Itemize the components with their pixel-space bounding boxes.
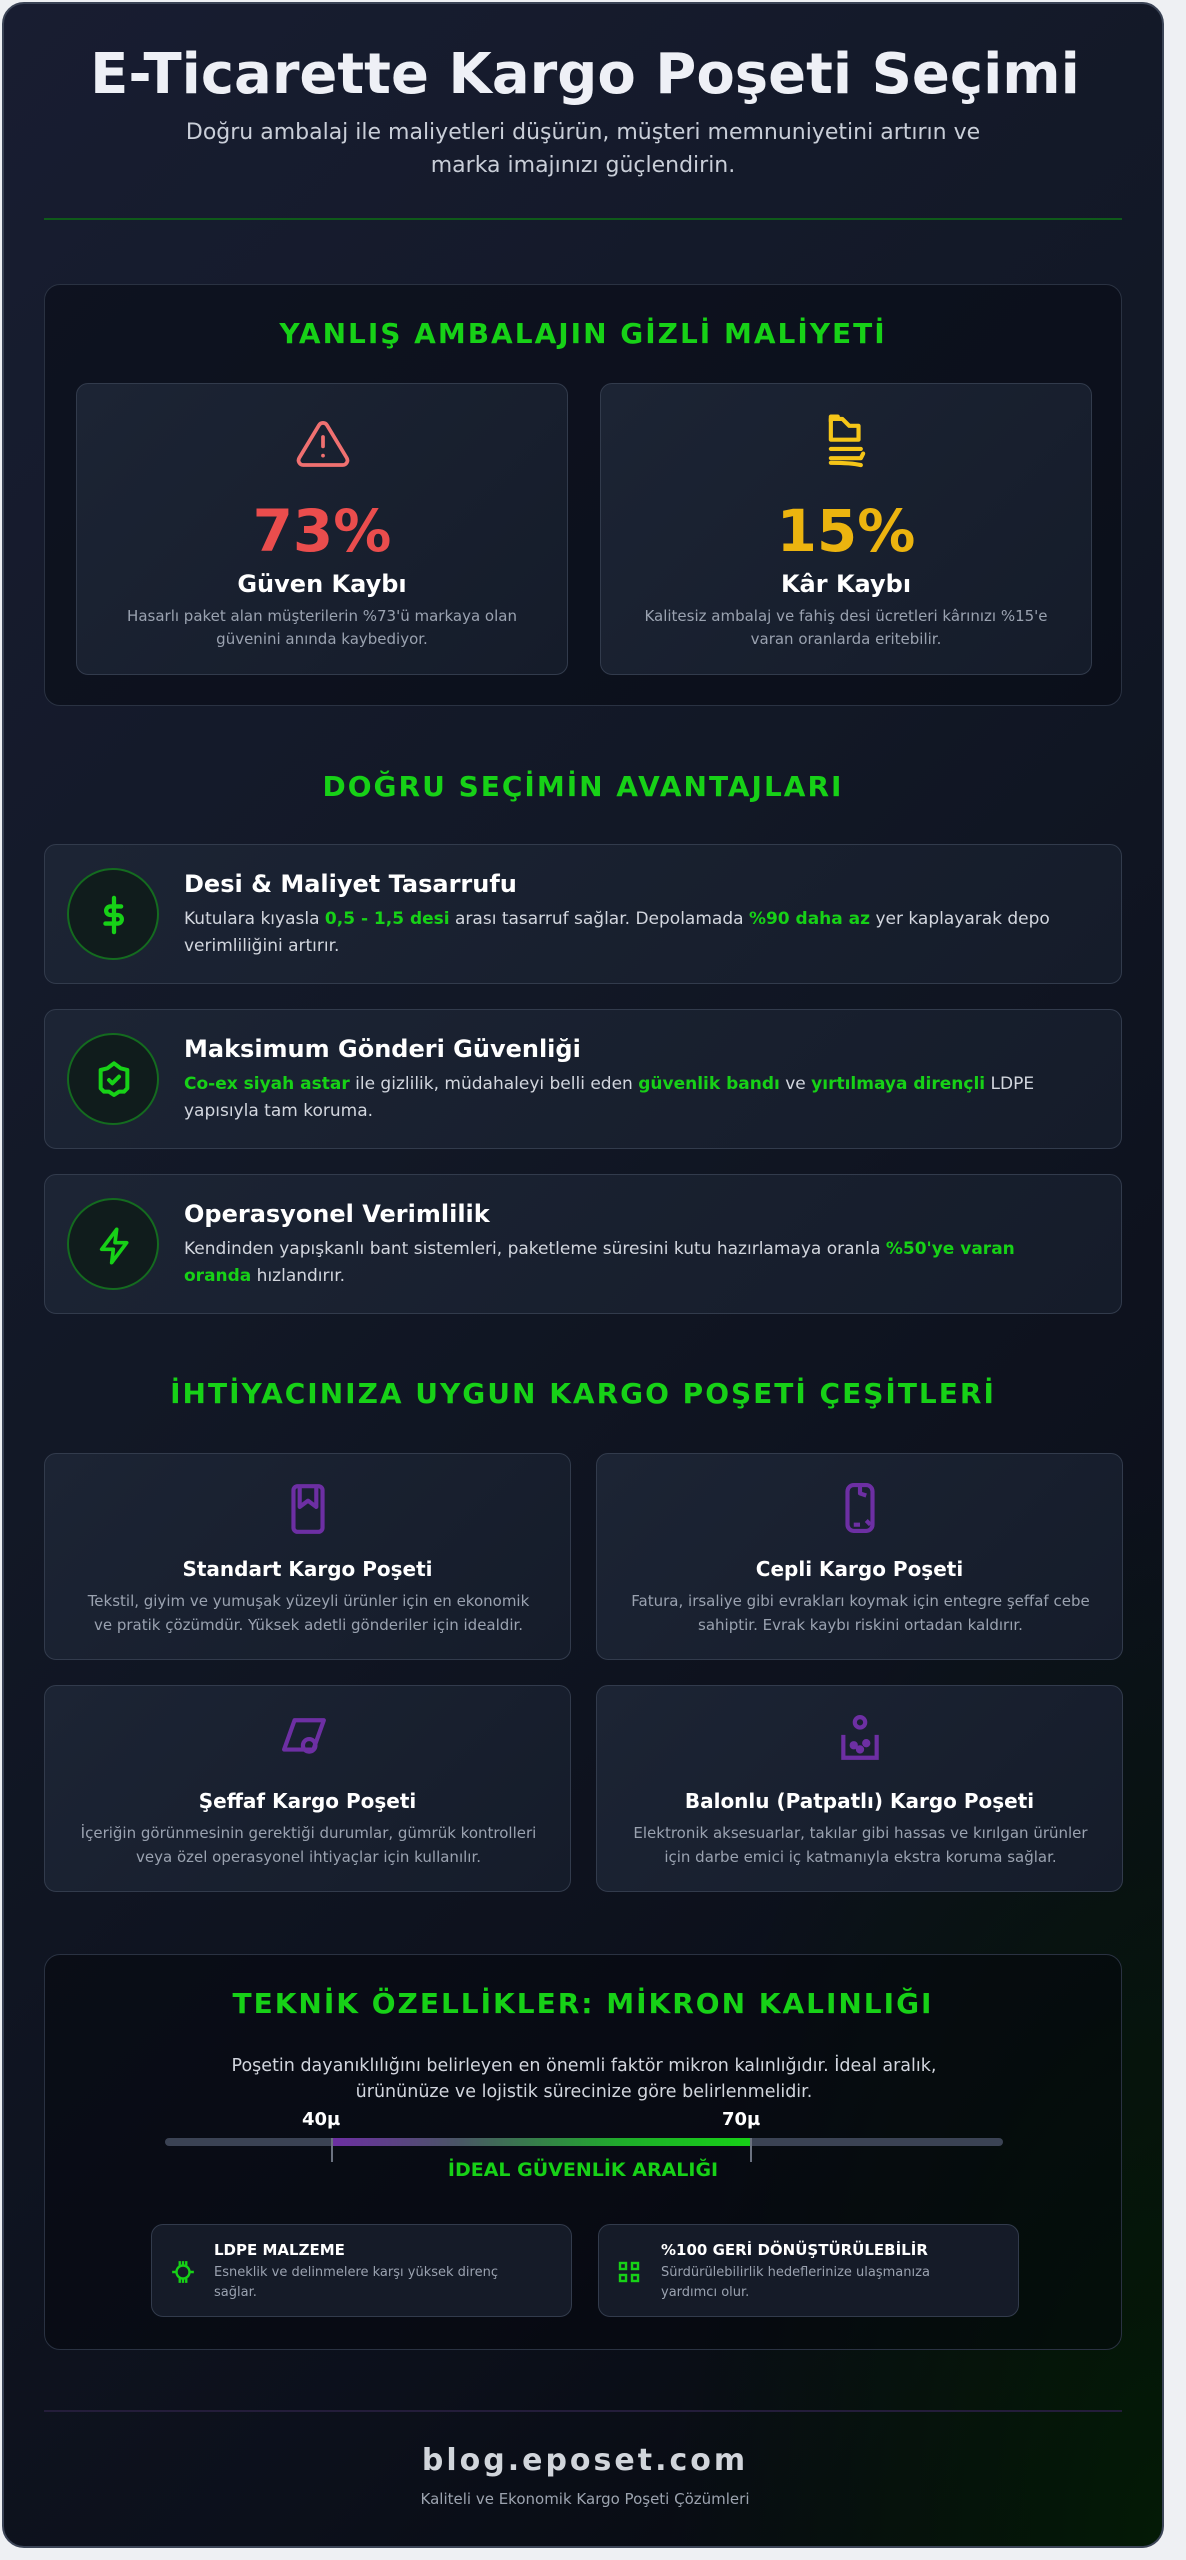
subtitle: Doğru ambalaj ile maliyetleri düşürün, müşteri memnuniyetini artırın ve marka imajınızı güçlendirin.	[186, 120, 980, 178]
icon: bubble	[841, 1715, 879, 1760]
footer: tagline: Kaliteli ve Ekonomik Kargo Poşeti Çözümleri	[421, 2490, 749, 2508]
type card: bubble	[596, 1685, 1123, 1892]
desc: Kalitesiz ambalaj ve fahiş desi ücretleri kârınızı %15'e varan oranlarda eritebilir.	[644, 607, 1048, 648]
chart: micron range	[165, 2109, 1003, 2162]
title: Balonlu (Patpatlı) Kargo Poşeti	[685, 1789, 1034, 1813]
spec: LDPE: Esneklik ve delinmelere karşı yüksek direnç sağlar.	[214, 2265, 498, 2300]
icon: grid	[618, 2262, 640, 2282]
feature: security	[44, 1009, 1122, 1149]
icon: lightning	[67, 1198, 159, 1290]
desc: İçeriğin görünmesinin gerektiği durumlar, gümrük kontrolleri veya özel operasyonel ihtiyaçlar için kullanılır.	[81, 1824, 536, 1866]
desc: Elektronik aksesuarlar, takılar gibi hassas ve kırılgan ürünler için darbe emici iç katmanıyla ekstra koruma sağlar.	[633, 1824, 1088, 1866]
icon: warning	[296, 421, 350, 467]
label: ideal range: İDEAL GÜVENLİK ARALIĞI	[448, 2159, 718, 2181]
title: Cepli Kargo Poşeti	[756, 1557, 963, 1581]
desc: Tekstil, giyim ve yumuşak yüzeyli ürünler için en ekonomik ve pratik çözümdür. Yüksek adetli gönderiler için idealdir.	[88, 1592, 529, 1634]
icon: money stack	[828, 414, 866, 468]
stat card: profit loss	[600, 383, 1092, 675]
panel: hidden cost	[44, 284, 1122, 706]
title: Operasyonel Verimlilik	[184, 1200, 490, 1228]
spec: recyclable: %100 GERİ DÖNÜŞTÜRÜLEBİLİR	[661, 2241, 928, 2259]
stat card: trust loss	[76, 383, 568, 675]
icon: gear	[172, 2261, 194, 2283]
title: Standart Kargo Poşeti	[182, 1557, 433, 1581]
icon: phone doc	[845, 1483, 875, 1533]
icon: dollar	[67, 868, 159, 960]
panel: micron thickness	[44, 1954, 1122, 2350]
icon: bookmark	[291, 1484, 325, 1534]
number 73%: 73%	[253, 497, 391, 565]
title: Maksimum Gönderi Güvenliği	[184, 1035, 581, 1063]
desc: Co-ex siyah astar ile gizlilik, müdahaleyi belli eden güvenlik bandı ve yırtılmaya dirençli LDPE yapısıyla tam koruma.	[184, 1074, 1034, 1121]
icon: shield check	[67, 1033, 159, 1125]
desc: Kutulara kıyasla 0,5 - 1,5 desi arası tasarruf sağlar. Depolamada %90 daha az yer kaplayarak depo verimliliğini artırır.	[184, 909, 1050, 956]
type card: standard	[44, 1453, 571, 1660]
spec: recyclable: Sürdürülebilirlik hedeflerinize ulaşmanıza yardımcı olur.	[661, 2265, 930, 2300]
spec: LDPE: LDPE MALZEME	[214, 2241, 345, 2259]
heading: bag types: İHTİYACINIZA UYGUN KARGO POŞETİ ÇEŞİTLERİ	[170, 1377, 996, 1410]
heading: technical: TEKNİK ÖZELLİKLER: MİKRON KALINLIĞI	[232, 1987, 933, 2020]
chart: micron range: 70µ	[722, 2109, 760, 2130]
spec: LDPE	[151, 2224, 572, 2317]
spec: recyclable	[598, 2224, 1019, 2317]
desc: Hasarlı paket alan müşterilerin %73'ü markaya olan güvenini anında kaybediyor.	[127, 607, 517, 648]
heading: hidden cost: YANLIŞ AMBALAJIN GİZLİ MALİYETİ	[279, 317, 887, 350]
label: Kâr Kaybı	[781, 570, 911, 598]
icon: transparent bag	[282, 1718, 326, 1754]
feature: desi savings	[44, 844, 1122, 984]
heading: advantages: DOĞRU SEÇİMİN AVANTAJLARI	[323, 770, 843, 803]
desc: Kendinden yapışkanlı bant sistemleri, paketleme süresini kutu hazırlamaya oranla %50'ye varan oranda hızlandırır.	[184, 1239, 1015, 1286]
desc: Fatura, irsaliye gibi evrakları koymak için entegre şeffaf cebe sahiptir. Evrak kaybı riskini ortadan kaldırır.	[631, 1592, 1090, 1634]
label: Güven Kaybı	[237, 570, 407, 598]
number 15%: 15%	[777, 497, 915, 565]
desc: Poşetin dayanıklılığını belirleyen en önemli faktör mikron kalınlığıdır. İdeal aralık, ürününüze ve lojistik sürecinize göre belirlenmelidir.	[232, 2056, 936, 2102]
title: E-Ticarette Kargo Poşeti Seçimi	[90, 42, 1080, 107]
feature: efficiency	[44, 1174, 1122, 1314]
title: Desi & Maliyet Tasarrufu	[184, 870, 517, 898]
chart: micron range: 40µ	[302, 2109, 340, 2130]
title: Şeffaf Kargo Poşeti	[199, 1789, 416, 1813]
footer: site: blog.eposet.com	[422, 2443, 748, 2478]
type card: pocket	[596, 1453, 1123, 1660]
type card: transparent	[44, 1685, 571, 1892]
